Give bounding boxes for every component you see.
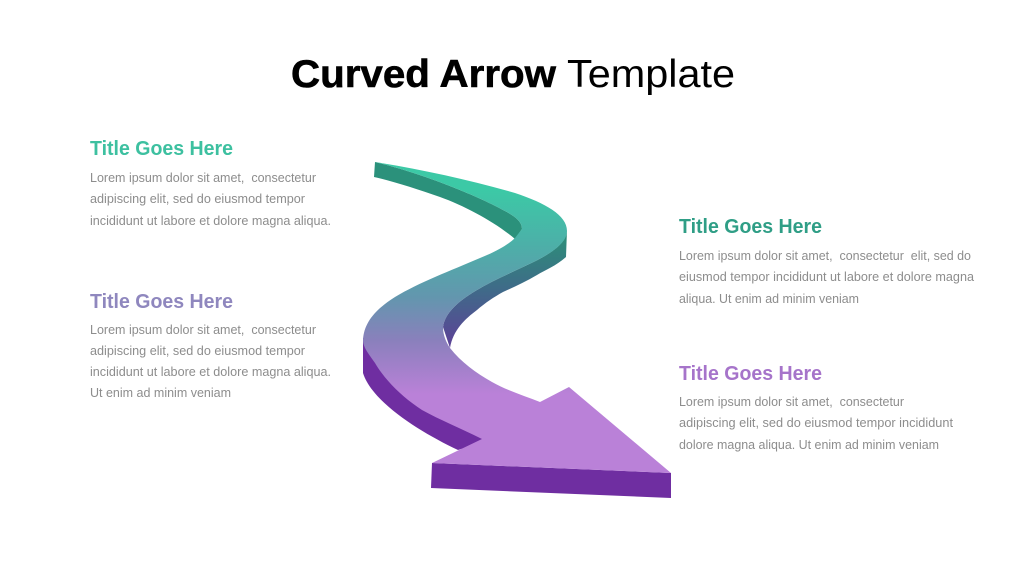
heading: top left: Title Goes Here bbox=[90, 138, 233, 160]
title bbox=[291, 53, 735, 96]
body: top left bbox=[90, 171, 331, 228]
body: lower left: Lorem ipsum dolor sit amet, consectetur bbox=[90, 323, 316, 337]
body: lower right: Lorem ipsum dolor sit amet, consectetur bbox=[679, 395, 904, 409]
arrow wall: left purple bbox=[363, 338, 490, 450]
body: upper right: aliqua. Ut enim ad minim veniam bbox=[679, 292, 859, 306]
arrow wall: right side bbox=[443, 230, 567, 348]
body: lower left: adipiscing elit, sed do eiusmod tempor bbox=[90, 344, 305, 358]
heading: lower right: Title Goes Here bbox=[679, 363, 822, 385]
body: top left: adipiscing elit, sed do eiusmod tempor bbox=[90, 192, 305, 206]
body: top left: Lorem ipsum dolor sit amet, consectetur bbox=[90, 171, 316, 185]
arrow top surface bbox=[363, 162, 671, 473]
body: lower right bbox=[679, 395, 954, 452]
body: upper right: Lorem ipsum dolor sit amet, consectetur elit, sed do bbox=[679, 249, 971, 263]
title: Template bbox=[567, 53, 735, 96]
curved 3D arrow bbox=[363, 162, 671, 498]
body: lower left: Ut enim ad minim veniam bbox=[90, 386, 231, 400]
arrow wall: arrowhead front bbox=[431, 463, 671, 498]
body: lower right: dolore magna aliqua. Ut enim ad minim veniam bbox=[679, 438, 939, 452]
heading: lower left: Title Goes Here bbox=[90, 291, 233, 313]
body: upper right bbox=[679, 249, 974, 306]
text block: lower right bbox=[679, 363, 954, 452]
body: upper right: eiusmod tempor incididunt ut labore et dolore magna bbox=[679, 270, 974, 284]
body: lower left: incididunt ut labore et dolore magna aliqua. bbox=[90, 365, 331, 379]
body: lower left bbox=[90, 323, 331, 400]
heading: upper right: Title Goes Here bbox=[679, 216, 822, 238]
text block: lower left bbox=[90, 291, 331, 400]
text block: upper right bbox=[679, 216, 974, 306]
title: Curved Arrow bbox=[291, 53, 557, 96]
body: top left: incididunt ut labore et dolore magna aliqua. bbox=[90, 214, 331, 228]
arrow wall: top inner green bbox=[374, 162, 522, 239]
body: lower right: adipiscing elit, sed do eiusmod tempor incididunt bbox=[679, 416, 954, 430]
text block: top left bbox=[90, 138, 331, 228]
